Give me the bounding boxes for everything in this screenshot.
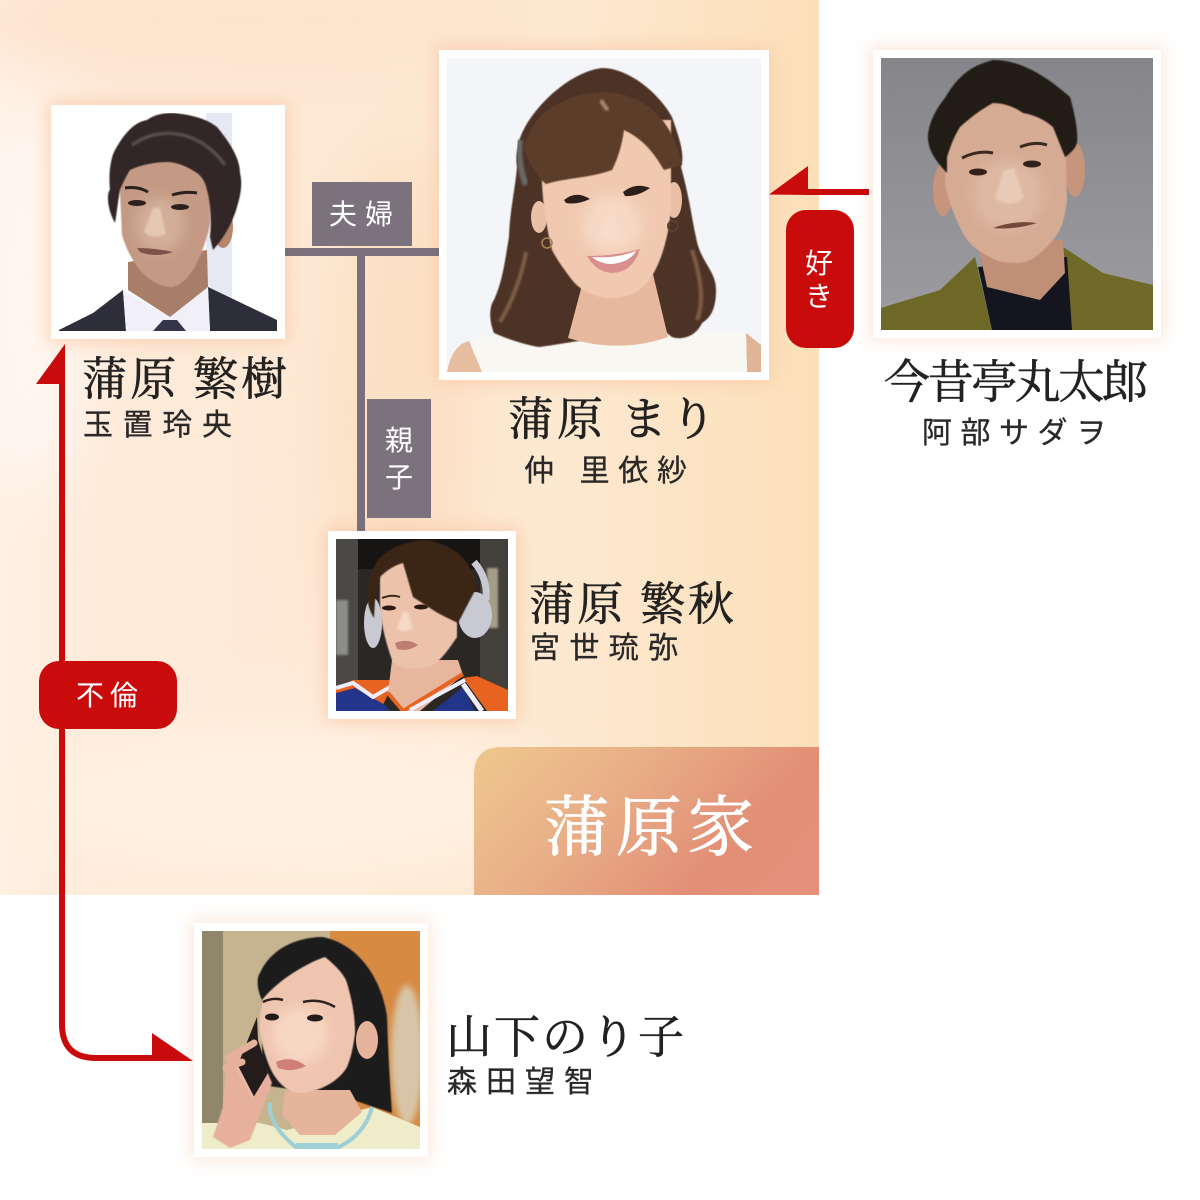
label: 親子 xyxy=(367,399,431,518)
actor: 阿部サダヲ: 阿部サダヲ xyxy=(922,417,1106,450)
actor: 玉置玲央: 玉置玲央 xyxy=(83,409,232,442)
label: 親子: 子 xyxy=(385,462,413,493)
frame glow: outside panel photos xyxy=(190,46,1165,1161)
label: 好き xyxy=(786,210,854,348)
actor: 宮世琉弥: 宮世琉弥 xyxy=(530,632,678,665)
arrow: love line xyxy=(769,166,869,195)
label: 不倫: 不倫 xyxy=(76,680,138,711)
name: 蒲原 繁秋 xyxy=(529,579,734,665)
photo: 蒲原繁樹 xyxy=(51,105,285,339)
family badge: 蒲原家: 蒲原家 xyxy=(544,792,754,865)
label: 親子: 親 xyxy=(385,425,413,456)
name: 山下のり子: 山下のり子 xyxy=(446,1012,684,1063)
family badge: 蒲原家 xyxy=(474,747,819,895)
photo: 山下のり子 xyxy=(194,923,428,1157)
name: 今昔亭丸太郎: 今昔亭丸太郎 xyxy=(884,357,1148,408)
photo: 蒲原繁秋 xyxy=(328,531,516,719)
label: 好き: き xyxy=(805,281,833,312)
name: 蒲原 繁秋: 蒲原 繁秋 xyxy=(529,579,734,630)
connector: parent-child line xyxy=(357,256,365,531)
name: 今昔亭丸太郎 xyxy=(884,357,1148,450)
name: 蒲原 繁樹: 蒲原 繁樹 xyxy=(82,354,287,405)
connector: couple line xyxy=(285,248,439,256)
actor: 森田望智: 森田望智 xyxy=(447,1066,594,1099)
panel: 蒲原家 background xyxy=(0,0,819,895)
label: 夫婦: 夫婦 xyxy=(329,199,393,230)
name: 山下のり子 xyxy=(446,1012,684,1099)
name: 蒲原 繁樹 xyxy=(82,354,287,442)
photo: 蒲原まり xyxy=(439,50,769,380)
label: 好き: 好 xyxy=(805,248,833,279)
arrow: affair line with both heads xyxy=(36,344,193,1061)
name: 蒲原 まり xyxy=(508,394,716,488)
label: 不倫 xyxy=(39,661,177,729)
actor: 仲 里依紗: 仲 里依紗 xyxy=(524,455,687,488)
frame glow: photos xyxy=(47,46,773,723)
photo: 今昔亭丸太郎 xyxy=(873,50,1161,338)
name: 蒲原 まり: 蒲原 まり xyxy=(508,394,716,445)
label: 夫婦 xyxy=(312,182,412,246)
